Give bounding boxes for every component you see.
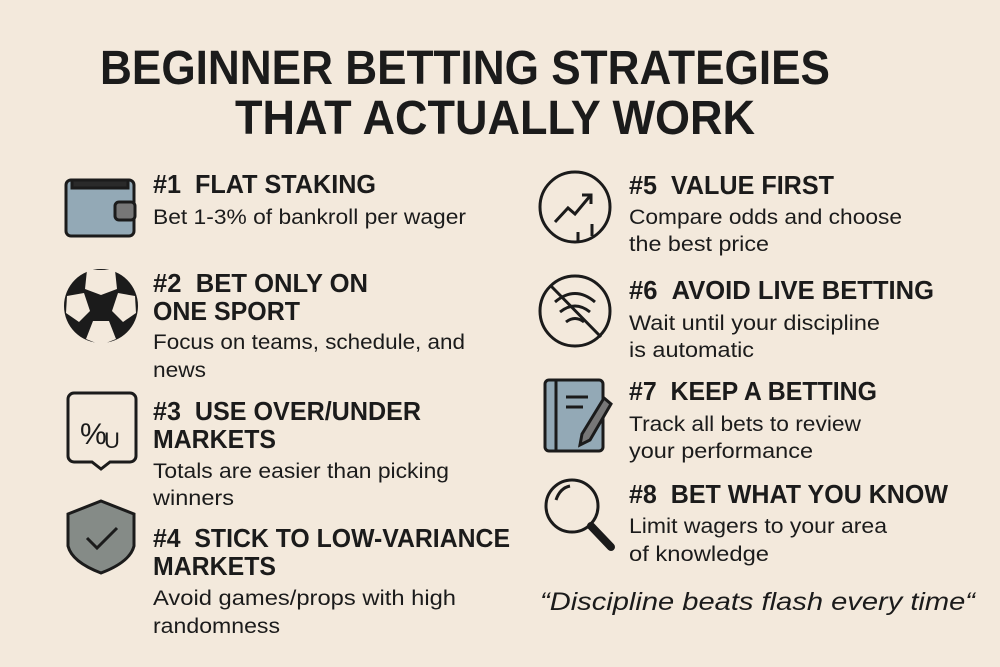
item 5: the best price: [629, 233, 769, 256]
item 3: Totals are easier than picking: [153, 460, 449, 483]
item 3: #3 USE OVER/UNDER: [153, 396, 421, 426]
item 1: #1 FLAT STAKING: [153, 169, 376, 199]
item 2: #2 BET ONLY ON: [153, 268, 368, 298]
title: BEGINNER BETTING STRATEGIES: [100, 42, 830, 95]
item 6: is automatic: [629, 339, 754, 362]
icon: no live: [540, 276, 610, 346]
item 1: Bet 1-3% of bankroll per wager: [153, 206, 466, 229]
item 2: [153, 268, 465, 382]
icon: soccer ball: [64, 269, 138, 345]
item 7: your performance: [629, 440, 813, 463]
icon: shield: [68, 501, 134, 573]
item 5: #5 VALUE FIRST: [629, 170, 834, 200]
icon: magnifier: [546, 480, 611, 547]
item 4: Avoid games/props with high: [153, 587, 456, 610]
item 7: Track all bets to review: [629, 413, 862, 436]
item 7: #7 KEEP A BETTING: [629, 376, 877, 406]
icon: over/under: %: [80, 418, 107, 451]
item 4: #4 STICK TO LOW-VARIANCE: [153, 523, 510, 553]
icon: over/under: [68, 393, 136, 469]
item 2: news: [153, 359, 206, 382]
item 6: #6 AVOID LIVE BETTING: [629, 275, 934, 305]
item 6: Wait until your discipline: [629, 312, 880, 335]
item 4: MARKETS: [153, 551, 276, 581]
item 2: ONE SPORT: [153, 296, 300, 326]
item 4: randomness: [153, 615, 280, 638]
item 8: Limit wagers to your area: [629, 515, 887, 538]
icon: over/under: U: [104, 428, 120, 453]
icon: trend circle: [540, 172, 610, 242]
item 5: Compare odds and choose: [629, 206, 902, 229]
item 8: #8 BET WHAT YOU KNOW: [629, 479, 948, 509]
icon: notebook: [545, 380, 611, 451]
title: THAT ACTUALLY WORK: [235, 92, 755, 145]
item 3: MARKETS: [153, 424, 276, 454]
title: [100, 42, 830, 145]
item 2: Focus on teams, schedule, and: [153, 331, 465, 354]
item 3: winners: [152, 487, 234, 510]
item 3: [152, 396, 449, 510]
item 8: [629, 479, 948, 566]
item 6: [629, 275, 934, 362]
item 4: [153, 523, 510, 638]
item 7: [629, 376, 877, 463]
item 8: of knowledge: [629, 543, 769, 566]
item 1: [153, 169, 466, 229]
item 5: [629, 170, 902, 256]
icon: wallet: [66, 180, 135, 236]
quote: “Discipline beats flash every time“: [540, 588, 977, 616]
